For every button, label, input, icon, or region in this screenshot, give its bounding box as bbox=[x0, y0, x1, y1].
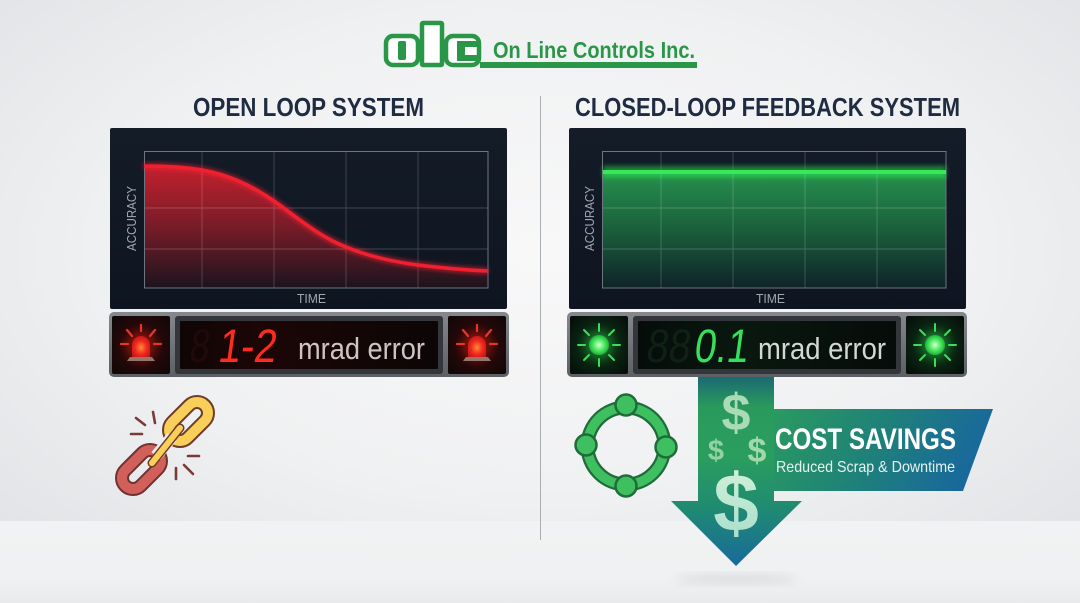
arrow: savings down arrow with dollar signs bbox=[671, 377, 802, 566]
panel: open loop accuracy chart bbox=[110, 128, 507, 309]
red accuracy curve bbox=[144, 166, 488, 271]
break gap and connector bbox=[156, 437, 172, 456]
glow of green line bbox=[603, 166, 946, 178]
arrow shadow on floor bbox=[674, 575, 798, 583]
callout: cost savings banner bbox=[774, 409, 993, 491]
readout: 1-2 mrad error: 8 bbox=[186, 320, 214, 373]
icon: green light left bbox=[570, 316, 628, 374]
green accuracy line bbox=[603, 170, 946, 174]
arrow: savings down arrow with dollar signs: $ bbox=[713, 458, 759, 549]
icon: red alarm left bbox=[112, 316, 170, 374]
axis label: accuracy: ACCURACY bbox=[124, 186, 139, 251]
readout: 1-2 mrad error: 1-2 bbox=[215, 320, 281, 373]
readout: 0.1 mrad error: 0.1 bbox=[691, 320, 753, 373]
axis label: accuracy: ACCURACY bbox=[582, 186, 597, 251]
axis label: time: TIME bbox=[297, 291, 326, 306]
status bar: closed loop bbox=[567, 312, 967, 377]
logo: On Line Controls Inc.: On Line Controls Inc. bbox=[493, 37, 695, 63]
heading: open loop system: OPEN LOOP SYSTEM bbox=[193, 92, 424, 122]
status bar: open loop bbox=[109, 312, 509, 377]
readout: 0.1 mrad error: 88 bbox=[643, 320, 695, 373]
heading: closed-loop feedback system: CLOSED-LOOP FEEDBACK SYSTEM bbox=[575, 92, 960, 122]
panel: closed loop accuracy chart bbox=[569, 128, 966, 309]
red link bbox=[117, 445, 166, 494]
dollar signs: $ bbox=[722, 384, 751, 442]
axis label: time: TIME bbox=[756, 291, 785, 306]
icon: green light right bbox=[906, 316, 964, 374]
logo: On Line Controls Inc. bbox=[386, 23, 697, 68]
icon: closed loop ring bbox=[576, 394, 676, 496]
center divider bbox=[540, 96, 541, 540]
readout: 1-2 mrad error bbox=[175, 316, 443, 374]
readout: 0.1 mrad error: mrad error bbox=[758, 331, 886, 366]
arrow: savings down arrow with dollar signs: $ bbox=[708, 435, 724, 467]
glow of red curve bbox=[144, 166, 488, 271]
readout: 1-2 mrad error: mrad error bbox=[298, 331, 425, 366]
icon: red alarm right bbox=[448, 316, 506, 374]
subtitle: Reduced Scrap & Downtime bbox=[776, 459, 955, 476]
arrow: savings down arrow with dollar signs: $ bbox=[748, 432, 767, 470]
readout: 0.1 mrad error bbox=[633, 316, 901, 374]
green area under line bbox=[603, 172, 946, 288]
icon: broken chain link bbox=[117, 397, 213, 494]
title: cost savings: COST SAVINGS bbox=[775, 423, 956, 456]
break sparks bbox=[131, 412, 199, 479]
red area under curve bbox=[144, 166, 488, 288]
gold link bbox=[164, 397, 213, 446]
